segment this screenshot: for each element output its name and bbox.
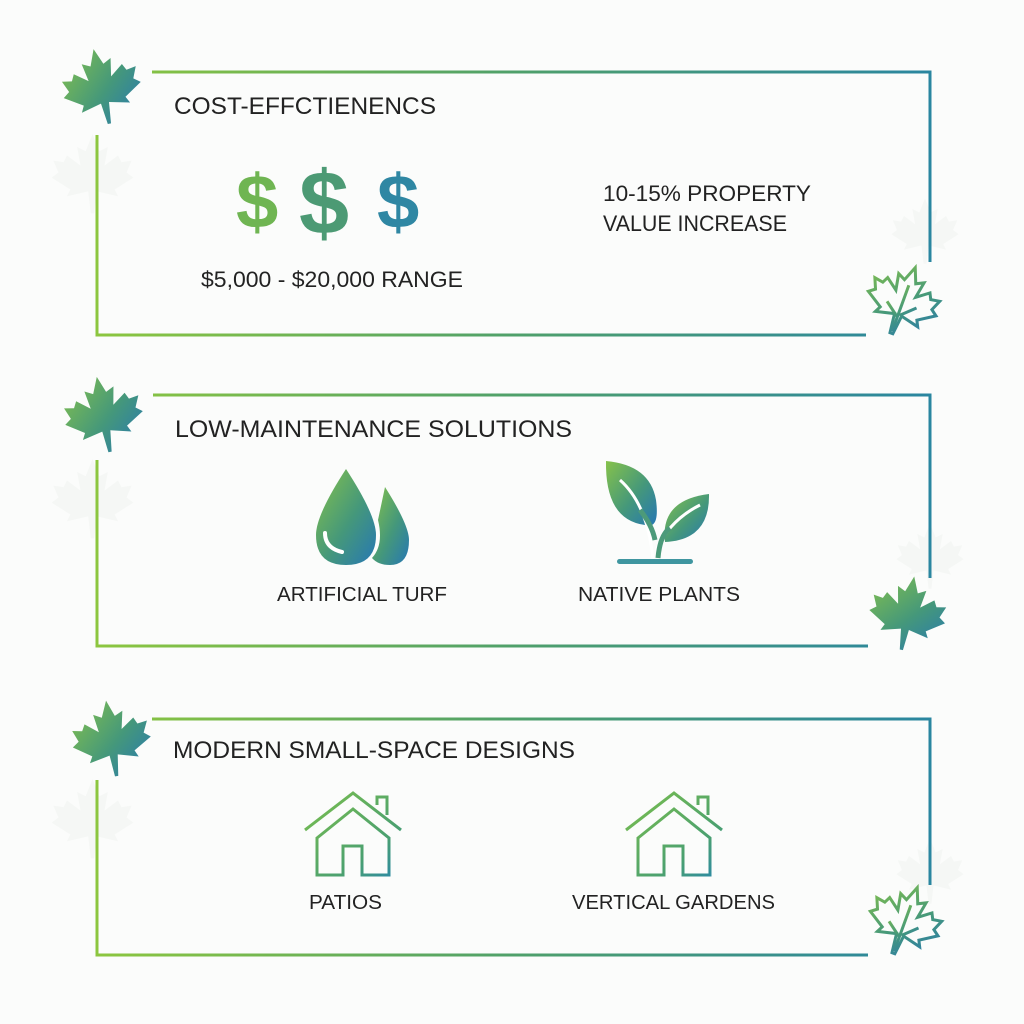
text: range: $5,000 - $20,000 RANGE	[201, 267, 463, 292]
heading: LOW-MAINTENANCE SOLUTIONS	[175, 416, 572, 443]
icon: house 2	[626, 793, 722, 875]
icon: dollar signs: $	[236, 160, 278, 245]
panel: small-space designs	[67, 695, 951, 966]
icon: maple leaf top-left	[55, 41, 148, 132]
panel: cost-efficiencies: VALUE INCREASE	[603, 211, 787, 236]
icon: dollar signs: $	[377, 160, 419, 245]
icon: dollar signs	[236, 154, 419, 254]
heading: COST-EFFCTIENENCS	[174, 93, 436, 120]
icon: maple leaf top-left	[67, 695, 156, 782]
background faint leaves	[52, 134, 964, 904]
label: native plants: NATIVE PLANTS	[578, 584, 740, 606]
heading: MODERN SMALL-SPACE DESIGNS	[173, 737, 575, 764]
label: artificial turf: ARTIFICIAL TURF	[277, 584, 447, 606]
icon: maple leaf top-left	[58, 370, 149, 459]
panel: cost-efficiencies	[55, 41, 949, 346]
icon: water drops	[316, 469, 409, 565]
icon: house 1	[305, 793, 401, 875]
text: property value: 10-15% PROPERTY	[603, 181, 811, 206]
icon: outline maple leaf	[858, 255, 949, 346]
panel: low-maintenance	[58, 370, 952, 656]
icon: maple leaf bottom-right	[864, 570, 952, 656]
icon: dollar signs: $	[299, 154, 349, 254]
icon: sprout	[606, 461, 709, 564]
icon: outline maple leaf	[860, 875, 951, 966]
label: patios: PATIOS	[309, 892, 382, 914]
label: vertical gardens: VERTICAL GARDENS	[572, 892, 775, 914]
